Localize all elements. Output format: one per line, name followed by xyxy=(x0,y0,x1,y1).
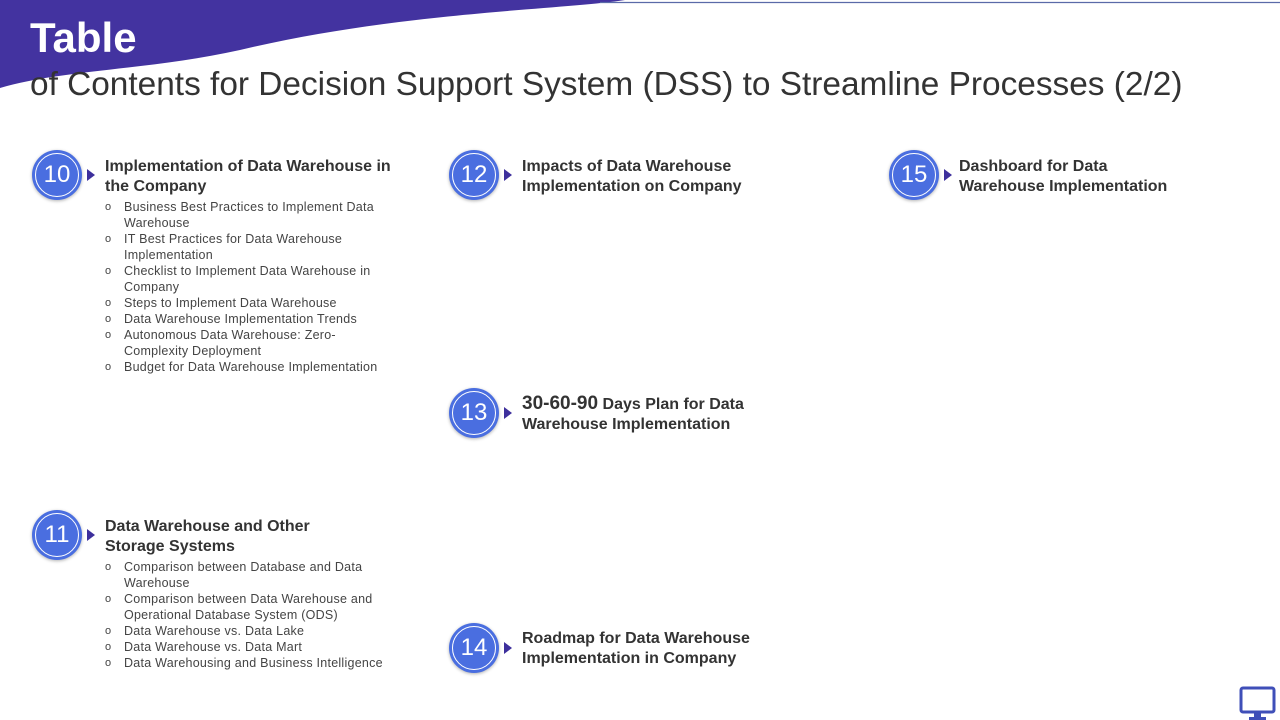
section 10: Steps to Implement Data Warehouse xyxy=(124,296,337,310)
section 10: Data Warehouse Implementation Trends xyxy=(124,312,357,326)
section 12 xyxy=(447,149,742,203)
section 11: 11 xyxy=(45,521,69,548)
section 10: Implementation of Data Warehouse in the Company xyxy=(105,158,391,194)
section 12: 12 xyxy=(461,161,487,188)
section 14: Roadmap for Data Warehouse Implementation in Company xyxy=(522,630,750,666)
section 10: Budget for Data Warehouse Implementation xyxy=(124,360,377,374)
section 10 xyxy=(30,149,391,374)
section 15 xyxy=(887,149,1167,203)
section 11: Data Warehousing and Business Intelligence xyxy=(124,656,383,670)
section 14: 14 xyxy=(461,634,487,661)
section 13 xyxy=(447,387,744,441)
section 12: Impacts of Data Warehouse Implementation on Company xyxy=(522,158,742,194)
section 10: Autonomous Data Warehouse: Zero-Complexity Deployment xyxy=(124,328,336,358)
section 15: 15 xyxy=(901,161,927,188)
section 10: IT Best Practices for Data Warehouse Implementation xyxy=(124,232,342,262)
section 11: Data Warehouse vs. Data Mart xyxy=(124,640,302,654)
section 11: Comparison between Data Warehouse and Operational Database System (ODS) xyxy=(124,592,373,622)
section 10: Checklist to Implement Data Warehouse in Company xyxy=(124,264,370,294)
section 14 xyxy=(447,622,750,676)
section 11: Comparison between Database and Data Warehouse xyxy=(124,560,362,590)
section 13: 30-60-90 Days Plan for Data Warehouse Implementation xyxy=(522,393,744,432)
title: of Contents for Decision Support System (DSS) to Streamline Processes (2/2) xyxy=(30,66,1182,103)
section 11 xyxy=(30,509,383,670)
header wave shape xyxy=(0,0,1280,88)
section 15: Dashboard for Data Warehouse Implementation xyxy=(959,158,1167,194)
title: Table xyxy=(30,14,137,61)
section 13: 13 xyxy=(461,399,487,426)
section 10: Business Best Practices to Implement Data Warehouse xyxy=(124,200,374,230)
section 11: Data Warehouse and Other Storage Systems xyxy=(105,518,310,554)
section 11: Data Warehouse vs. Data Lake xyxy=(124,624,304,638)
icon: monitor xyxy=(1240,686,1276,720)
section 10: 10 xyxy=(44,161,70,188)
title xyxy=(30,14,1182,103)
